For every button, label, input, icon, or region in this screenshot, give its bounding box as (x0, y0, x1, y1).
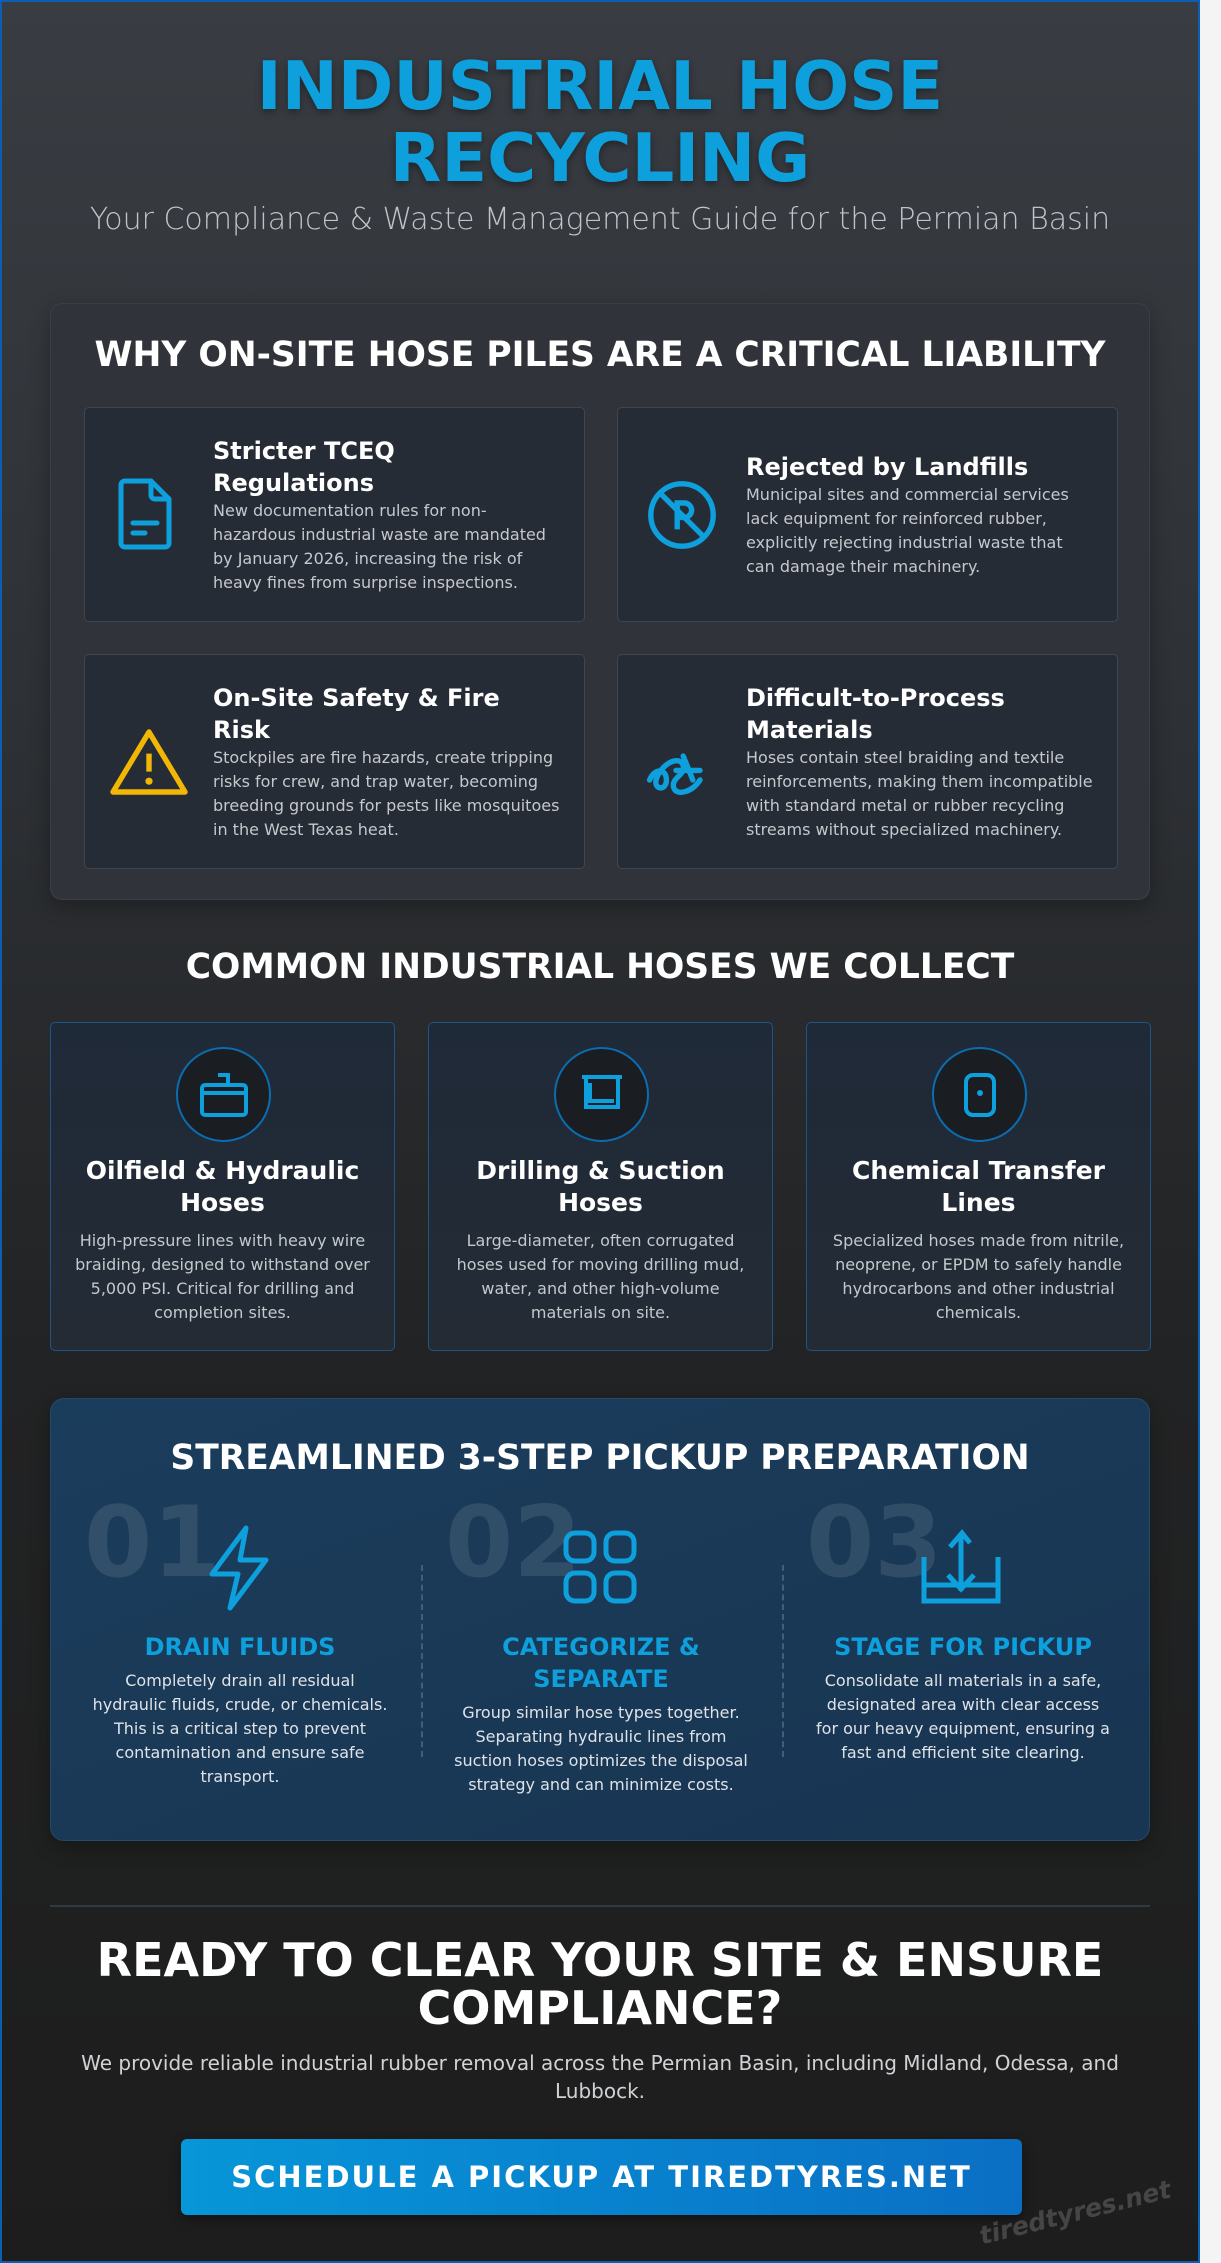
card: landfills: Rejected by Landfills (746, 452, 1028, 480)
heading: hoses: COMMON INDUSTRIAL HOSES WE COLLECT (186, 947, 1014, 987)
hose card: oilfield: Oilfield & Hydraulic (86, 1156, 359, 1185)
hose card: oilfield (50, 1022, 395, 1351)
step 2: Group similar hose types together. Separating hydraulic lines from suction hoses optimizes the disposal strategy and can minimize costs. (454, 1703, 748, 1794)
step 2: CATEGORIZE & (502, 1633, 700, 1661)
hose card: chemical: Chemical Transfer (852, 1156, 1105, 1185)
heading: steps: STREAMLINED 3-STEP PICKUP PREPARATION (170, 1438, 1030, 1478)
card: safety: On-Site Safety & Fire (213, 684, 500, 712)
hose card: drilling: Large-diameter, often corrugated hoses used for moving drilling mud, water, and other high-volume materials on site. (457, 1231, 744, 1322)
card: materials (617, 654, 1118, 869)
icon: hose curl (646, 753, 703, 795)
icon: tank (554, 1047, 649, 1142)
card: TCEQ (84, 407, 585, 622)
panel: steps (50, 1398, 1150, 1841)
card: landfills: Municipal sites and commercial services lack equipment for reinforced rubber, explicitly rejecting industrial waste that can damage their machinery. (746, 484, 1069, 576)
card: landfills (617, 407, 1118, 622)
title (257, 47, 943, 197)
hose card: drilling: Hoses (558, 1188, 643, 1217)
button: SCHEDULE A PICKUP AT TIREDTYRES.NET (231, 2160, 972, 2194)
card: safety: Risk (213, 716, 270, 744)
card: materials: Hoses contain steel braiding and textile reinforcements, making them incompatible with standard metal or rubber recycling streams without specialized machinery. (746, 748, 1093, 838)
watermark: tiredtyres.net (976, 2175, 1174, 2250)
hose card: drilling (428, 1022, 773, 1351)
hose card: oilfield: Hoses (180, 1188, 265, 1217)
step 1: DRAIN FLUIDS (145, 1633, 335, 1661)
card: materials: Difficult-to-Process (746, 684, 1005, 712)
cta heading: COMPLIANCE? (418, 1981, 782, 2035)
card: safety: Stockpiles are fire hazards, create tripping risks for crew, and trap water, becoming breeding grounds for pests like mosquitoes in the West Texas heat. (213, 748, 559, 838)
divider 1 (421, 1565, 423, 1757)
number 03: 03 (806, 1486, 942, 1600)
step 3: Consolidate all materials in a safe, designated area with clear access for our heavy equipment, ensuring a fast and efficient site clearing. (816, 1671, 1110, 1762)
hose card: chemical: Specialized hoses made from nitrile, neoprene, or EPDM to safely handle hydrocarbons and other industrial chemicals. (833, 1231, 1124, 1322)
hose card: oilfield: High-pressure lines with heavy wire braiding, designed to withstand over 5,000 PSI. Critical for drilling and completion sites. (75, 1231, 370, 1322)
icon: no-entry (648, 481, 716, 549)
hose card: chemical: Lines (941, 1188, 1016, 1217)
cta text: We provide reliable industrial rubber removal across the Permian Basin, including Midland, Odessa, and Lubbock. (81, 2051, 1119, 2103)
step 2: SEPARATE (533, 1665, 669, 1693)
icon: bolt (210, 1526, 268, 1610)
button (181, 2139, 1022, 2215)
card: safety (84, 654, 585, 869)
card: TCEQ: Regulations (213, 468, 374, 496)
step 2 (454, 1633, 748, 1794)
number 02: 02 (445, 1486, 581, 1600)
icon: container (932, 1047, 1027, 1142)
step 1: Completely drain all residual hydraulic fluids, crude, or chemicals. This is a critical step to prevent contamination and ensure safe transport. (93, 1671, 387, 1786)
card: TCEQ: Stricter TCEQ (213, 436, 395, 464)
number 01: 01 (84, 1486, 220, 1600)
icon: document (118, 478, 172, 550)
cta heading (97, 1933, 1103, 2035)
divider 2 (782, 1565, 784, 1757)
cta heading: READY TO CLEAR YOUR SITE & ENSURE (97, 1933, 1103, 1987)
icon: staging (922, 1529, 1000, 1604)
icon: grid (564, 1530, 636, 1604)
icon: toolbox (176, 1047, 271, 1142)
card: materials: Materials (746, 716, 873, 744)
hose card: chemical (806, 1022, 1151, 1351)
hose card: drilling: Drilling & Suction (476, 1156, 725, 1185)
title: INDUSTRIAL HOSE (257, 47, 943, 125)
heading: liabilities: WHY ON-SITE HOSE PILES ARE A CRITICAL LIABILITY (94, 335, 1106, 375)
title: RECYCLING (390, 119, 810, 197)
panel: liabilities (50, 303, 1150, 900)
subtitle: Your Compliance & Waste Management Guide for the Permian Basin (90, 202, 1110, 237)
step 3: STAGE FOR PICKUP (834, 1633, 1092, 1661)
card: TCEQ: New documentation rules for non-hazardous industrial waste are mandated by January 2026, increasing the risk of heavy fines from surprise inspections. (213, 500, 546, 592)
icon: warning (110, 729, 188, 795)
